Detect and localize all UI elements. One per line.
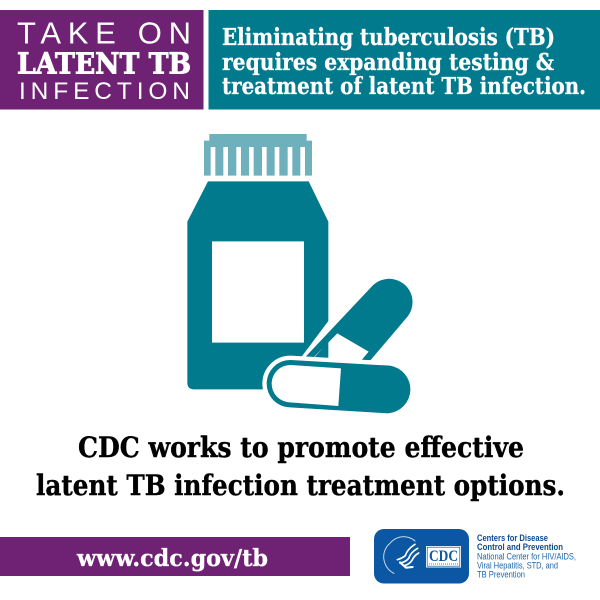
icon: pill bottle and capsules [187, 134, 413, 413]
text: agency name: Viral Hepatitis, STD, and [477, 560, 558, 570]
panel: key message [208, 10, 600, 110]
heading: take on: TAKE ON [17, 16, 191, 50]
heading: latent tb: LATENT TB [17, 46, 191, 80]
text: agency name: Control and Prevention [477, 542, 563, 552]
text: main statement: CDC works to promote effective [78, 431, 524, 464]
panel: campaign title [0, 10, 204, 110]
text: main statement [36, 431, 565, 502]
icon: HHS eagle seal [384, 537, 419, 573]
icon: lower capsule [267, 360, 410, 413]
icon: bottle body [187, 181, 328, 389]
logo: CDC mark: CDC [429, 548, 458, 565]
text: agency name: TB Prevention [477, 570, 525, 580]
text: agency name: National Center for HIV/AIDS, [477, 552, 576, 562]
panel: website banner [0, 537, 350, 576]
heading: infection: INFECTION [19, 78, 190, 105]
icon: upper capsule [302, 279, 413, 362]
text: message line 1: Eliminating tuberculosis (TB) [222, 24, 555, 51]
logo: CDC mark [426, 546, 461, 568]
text: agency name [477, 533, 576, 580]
text: agency name: Centers for Disease [477, 533, 548, 543]
panel: website banner: www.cdc.gov/tb [76, 545, 268, 572]
text: message line 2: requires expanding testing & [222, 49, 554, 76]
logo: HHS and CDC [374, 529, 576, 584]
icon: bottle cap [204, 134, 312, 176]
